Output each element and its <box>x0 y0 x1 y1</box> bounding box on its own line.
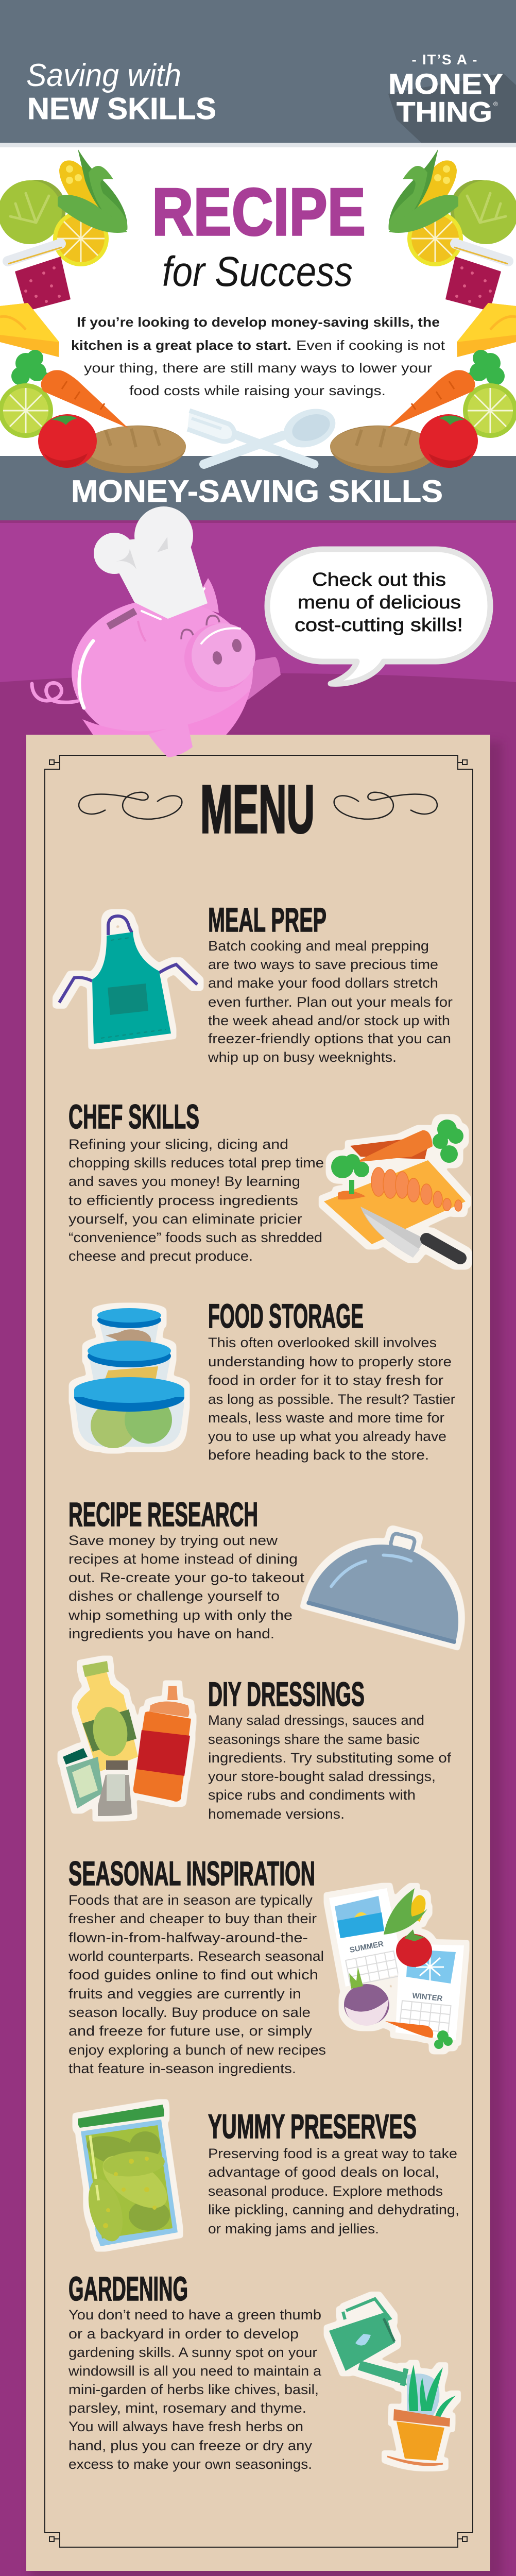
body text: are two ways to save precious time <box>208 957 438 972</box>
logo: It's a Money Thing: - IT’S A - <box>412 52 477 67</box>
icon: bread <box>79 423 187 476</box>
icon: seasonal calendars with produce <box>329 1888 464 2049</box>
icon: watering can and potted plant <box>329 2299 456 2465</box>
body text: seasonings share the same basic <box>208 1732 420 1747</box>
tomato <box>396 1934 432 1967</box>
icon: lemon <box>53 211 109 266</box>
heading: GARDENING <box>68 2269 188 2308</box>
icon: crossed fork and spoon <box>187 402 341 464</box>
pig eyes <box>181 616 219 639</box>
logo: It's a Money Thing: ® <box>493 100 498 108</box>
section: chef skills <box>68 1097 466 1264</box>
heading: DIY DRESSINGS <box>208 1675 365 1713</box>
body text: ingredients you have on hand. <box>68 1626 274 1641</box>
turnip <box>344 1984 389 2025</box>
body text: the week ahead and/or stock up with <box>208 1013 450 1028</box>
body text: Batch cooking and meal prepping <box>208 938 429 954</box>
summer calendar <box>329 1888 405 1987</box>
body text: fruits and veggies are currently in <box>68 1986 301 2002</box>
icon: tomato <box>38 414 97 468</box>
flourish right <box>334 792 437 819</box>
body text: and make your food dollars stretch <box>208 975 438 991</box>
body text: parsley, mint, rosemary and thyme. <box>68 2400 306 2416</box>
summer calendar: SUMMER <box>349 1939 384 1955</box>
series title: NEW SKILLS <box>27 92 216 126</box>
series title <box>26 58 216 126</box>
body text: hand, plus you can freeze or dry any <box>68 2438 313 2453</box>
icon: apron <box>59 916 197 1044</box>
carrot <box>385 2021 433 2038</box>
body text: You will always have fresh herbs on <box>68 2419 303 2434</box>
body text: before heading back to the store. <box>208 1447 429 1463</box>
heading: MEAL PREP <box>208 901 326 939</box>
body text: flown-in-from-halfway-around-the- <box>68 1930 308 1945</box>
pig raised foot <box>240 657 281 706</box>
body text: Many salad dressings, sauces and <box>208 1713 424 1728</box>
body text: season locally. Buy produce on sale <box>68 2005 311 2020</box>
speech bubble: menu of delicious <box>298 591 461 613</box>
heading: SEASONAL INSPIRATION <box>68 1854 315 1892</box>
body text: as long as possible. The result? Tastier <box>208 1392 455 1407</box>
illustration: chef piggy bank <box>32 506 281 745</box>
section: recipe research <box>68 1495 479 1645</box>
body text: fresher and cheaper to buy than their <box>68 1911 317 1926</box>
body text: seasonal produce. Explore methods <box>208 2183 443 2199</box>
icon: broccoli <box>11 350 50 385</box>
coin slot <box>108 611 135 626</box>
intro panel <box>0 147 516 456</box>
body text <box>68 1137 324 1264</box>
pig belly shading <box>82 690 250 742</box>
pig snout <box>184 623 255 692</box>
speech bubble <box>267 549 490 684</box>
body text: cheese and precut produce. <box>68 1248 253 1264</box>
body text: Refining your slicing, dicing and <box>68 1137 288 1152</box>
icon: stacked food containers <box>74 1308 184 1448</box>
body text: chopping skills reduces total prep time <box>68 1155 324 1171</box>
body text: “convenience” foods such as shredded <box>68 1230 322 1245</box>
body text: excess to make your own seasonings. <box>68 2456 312 2472</box>
body text: and freeze for future use, or simply <box>68 2023 313 2039</box>
body text: advantage of good deals on local, <box>208 2164 439 2180</box>
winter calendar: WINTER <box>412 1991 443 2003</box>
body text: freezer-friendly options that you can <box>208 1031 451 1046</box>
flourish left <box>79 792 182 819</box>
icon: carrot <box>41 370 128 428</box>
heading: RECIPE RESEARCH <box>68 1495 258 1533</box>
body text: windowsill is all you need to maintain a <box>68 2363 321 2379</box>
icon: lime <box>0 383 53 438</box>
section: seasonal inspiration <box>68 1854 464 2076</box>
body text: whip up on busy weeknights. <box>208 1049 397 1065</box>
series title: Saving with <box>26 58 181 93</box>
icon: bottles <box>63 1661 191 1816</box>
logo: It's a Money Thing: THING <box>397 96 492 128</box>
winter calendar <box>395 1944 464 2040</box>
intro text: kitchen is a great place to start. <box>71 337 291 353</box>
body text: your store-bought salad dressings, <box>208 1769 436 1784</box>
body text: recipes at home instead of dining <box>68 1551 298 1567</box>
heading: FOOD STORAGE <box>208 1297 364 1335</box>
pig tail <box>32 683 77 702</box>
icon: jam jar <box>8 244 71 311</box>
icon: serving cloche <box>306 1516 479 1645</box>
logo: It's a Money Thing: MONEY <box>388 67 503 100</box>
icon: lettuce <box>0 180 66 244</box>
panel shadow <box>31 742 502 2576</box>
speech bubble: cost-cutting skills! <box>295 614 463 635</box>
section: meal prep <box>59 901 453 1065</box>
icon: pickle jar <box>78 2105 178 2246</box>
section: gardening <box>68 2269 456 2472</box>
body text: yourself, you can eliminate pricier <box>68 1211 302 1227</box>
intro text: If you’re looking to develop money-saving skills, the <box>77 314 440 330</box>
icon: corn <box>59 149 127 230</box>
heading: MENU: MENU <box>200 771 315 847</box>
menu border <box>45 755 473 2547</box>
body text: dishes or challenge yourself to <box>68 1588 280 1604</box>
section: DIY dressings <box>63 1661 452 1822</box>
intro text: your thing, there are still many ways to lower your <box>84 360 432 376</box>
illustration: food border left <box>0 149 187 476</box>
body text: This often overlooked skill involves <box>208 1335 437 1350</box>
body text <box>208 938 453 1065</box>
body text: whip something up with only the <box>68 1607 293 1623</box>
purple section background <box>0 520 516 2576</box>
body text: spice rubs and condiments with <box>208 1787 416 1803</box>
body text: that feature in-season ingredients. <box>68 2061 296 2076</box>
body text: Save money by trying out new <box>68 1533 278 1548</box>
body text <box>68 1533 305 1641</box>
body text: like pickling, canning and dehydrating, <box>208 2202 459 2217</box>
corn <box>384 1888 427 1935</box>
body text: You don’t need to have a green thumb <box>68 2307 321 2323</box>
body text <box>68 1892 326 2076</box>
body text: world counterparts. Research seasonal <box>68 1948 324 1964</box>
body text: even further. Plan out your meals for <box>208 994 453 1010</box>
body text: or making jams and jellies. <box>208 2221 379 2236</box>
body text: mini-garden of herbs like chives, basil, <box>68 2382 319 2397</box>
body text: and saves you money! By learning <box>68 1174 300 1189</box>
section band: money-saving skills <box>0 456 516 520</box>
sauce bottle <box>167 1686 178 1700</box>
illustration: food border right <box>329 149 516 476</box>
section band: money-saving skills: MONEY-SAVING SKILLS <box>71 474 443 509</box>
body text: meals, less waste and more time for <box>208 1410 444 1426</box>
body text: food guides online to find out which <box>68 1967 318 1982</box>
small spice shaker grey <box>98 1775 132 1816</box>
intro text: food costs while raising your savings. <box>129 383 386 398</box>
icon: cheese <box>0 303 59 357</box>
body text: understanding how to properly store <box>208 1354 452 1369</box>
body text: homemade versions. <box>208 1806 345 1822</box>
body text: Preserving food is a great way to take <box>208 2146 457 2161</box>
intro text: Even if cooking is not <box>296 337 445 353</box>
speech bubble: Check out this <box>312 569 446 590</box>
pig highlights <box>79 588 204 708</box>
small spice shaker teal <box>66 1757 103 1808</box>
yellow bottle <box>77 1668 138 1772</box>
body text: enjoy exploring a bunch of new recipes <box>68 2042 326 2058</box>
body text: to efficiently process ingredients <box>68 1193 298 1208</box>
body text: Foods that are in season are typically <box>68 1892 313 1908</box>
body text: food in order for it to stay fresh for <box>208 1372 443 1388</box>
section: yummy preserves <box>78 2105 459 2246</box>
pig ear <box>201 578 219 613</box>
body text: out. Re-create your go-to takeout <box>68 1570 305 1585</box>
pig body <box>72 599 253 745</box>
heading: for Success: for Success <box>162 248 353 295</box>
body text: you to use up what you already have <box>208 1429 446 1444</box>
body text <box>208 1713 452 1822</box>
heading: RECIPE: RECIPE <box>152 174 366 249</box>
chef hat <box>94 506 208 619</box>
heading: CHEF SKILLS <box>68 1097 199 1136</box>
icon: cutting board with carrots and knife <box>324 1120 466 1258</box>
body text: gardening skills. A sunny spot on your <box>68 2345 317 2360</box>
panel: menu <box>26 735 490 2571</box>
body text <box>68 2307 321 2472</box>
body text: ingredients. Try substituting some of <box>208 1750 452 1766</box>
logo: It's a Money Thing <box>388 52 516 143</box>
icon: corn husk front <box>58 195 127 233</box>
body text <box>208 2146 459 2236</box>
body text <box>208 1335 455 1463</box>
body text: or a backyard in order to develop <box>68 2326 299 2342</box>
header band <box>0 0 516 147</box>
pig front leg <box>148 723 193 757</box>
section: food storage <box>74 1297 455 1463</box>
intro text <box>71 314 445 398</box>
